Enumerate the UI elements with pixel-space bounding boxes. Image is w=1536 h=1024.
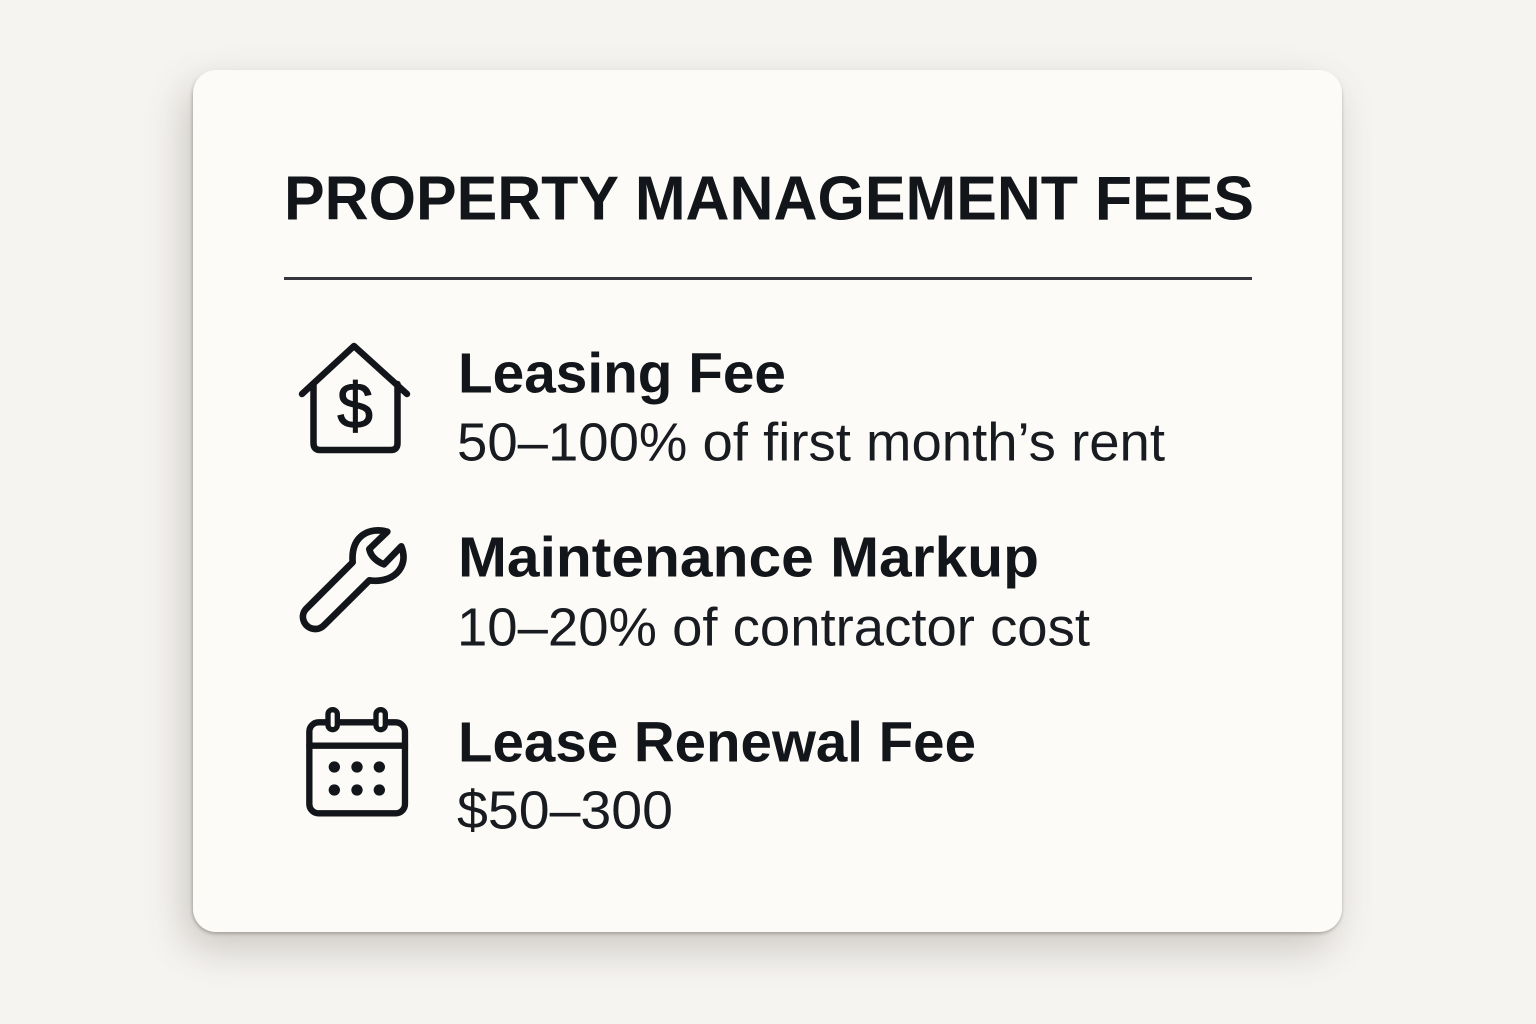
panel: fee card: [193, 70, 1342, 932]
title: PROPERTY MANAGEMENT FEES: [284, 164, 1254, 234]
fee row: maintenance markup: [303, 526, 1090, 658]
icon: house with dollar sign: $: [337, 370, 373, 442]
icon: house with dollar sign: [302, 346, 407, 450]
fee row: leasing fee: [302, 342, 1165, 472]
heading: maintenance markup: Maintenance Markup: [458, 526, 1039, 590]
text: maintenance markup amount: 10–20% of contractor cost: [457, 598, 1090, 658]
heading: leasing fee: Leasing Fee: [458, 342, 786, 406]
icon: wrench: [303, 530, 404, 629]
text: leasing fee amount: 50–100% of first month’s rent: [457, 412, 1165, 472]
icon: calendar: [309, 710, 405, 813]
heading: lease renewal fee: Lease Renewal Fee: [458, 710, 976, 774]
text: lease renewal fee amount: $50–300: [457, 780, 673, 840]
fee row: lease renewal fee: [309, 710, 976, 840]
